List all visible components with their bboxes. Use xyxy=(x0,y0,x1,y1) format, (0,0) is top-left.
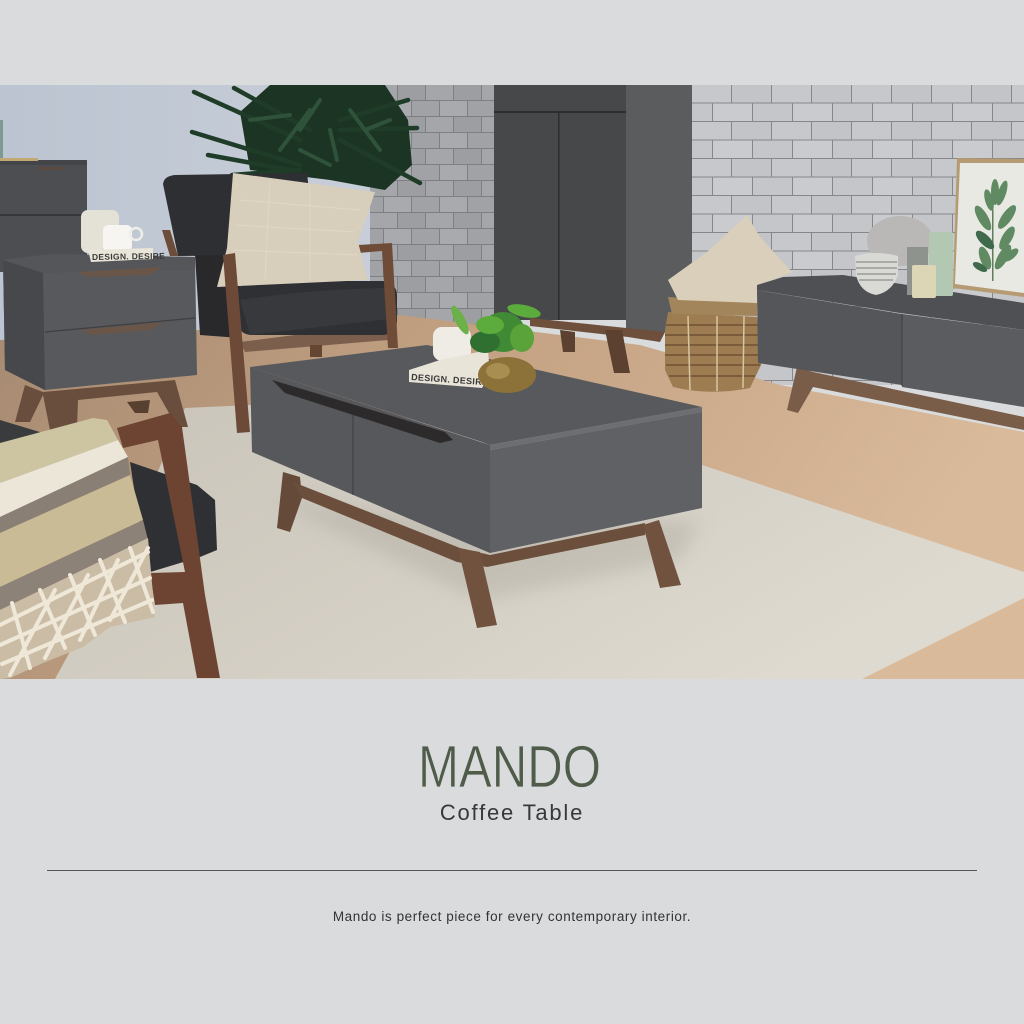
dark brick wall xyxy=(370,85,496,325)
nightstand xyxy=(3,254,197,430)
decor on coffee table xyxy=(409,302,542,393)
decor on console xyxy=(855,216,953,298)
armchair xyxy=(162,173,398,433)
subtitle: Coffee Table xyxy=(440,800,584,825)
basket and cushion xyxy=(665,215,792,392)
description text: Mando is perfect piece for every contemporary interior. xyxy=(333,909,691,924)
TV console xyxy=(757,275,1024,430)
vase, mug and book on nightstand xyxy=(81,210,165,262)
table shadow on rug xyxy=(270,500,700,600)
foreground armchair xyxy=(117,413,220,678)
plant xyxy=(192,85,420,190)
vase, mug and book on nightstand: DESIGN. DESIRE xyxy=(92,251,165,262)
wood floor xyxy=(0,315,1024,679)
decor on coffee table: DESIGN. DESIRE xyxy=(411,372,489,387)
framed botanical print xyxy=(953,158,1024,297)
title: MANDO xyxy=(418,735,601,800)
light brick wall xyxy=(692,85,1024,385)
side cabinet back left xyxy=(0,120,87,272)
knitted throw blanket xyxy=(0,418,155,679)
tall cabinet xyxy=(494,85,692,373)
left wall xyxy=(0,85,400,365)
coffee table xyxy=(250,345,702,628)
product photo: living room scene xyxy=(0,85,1024,679)
rug xyxy=(55,405,1024,679)
